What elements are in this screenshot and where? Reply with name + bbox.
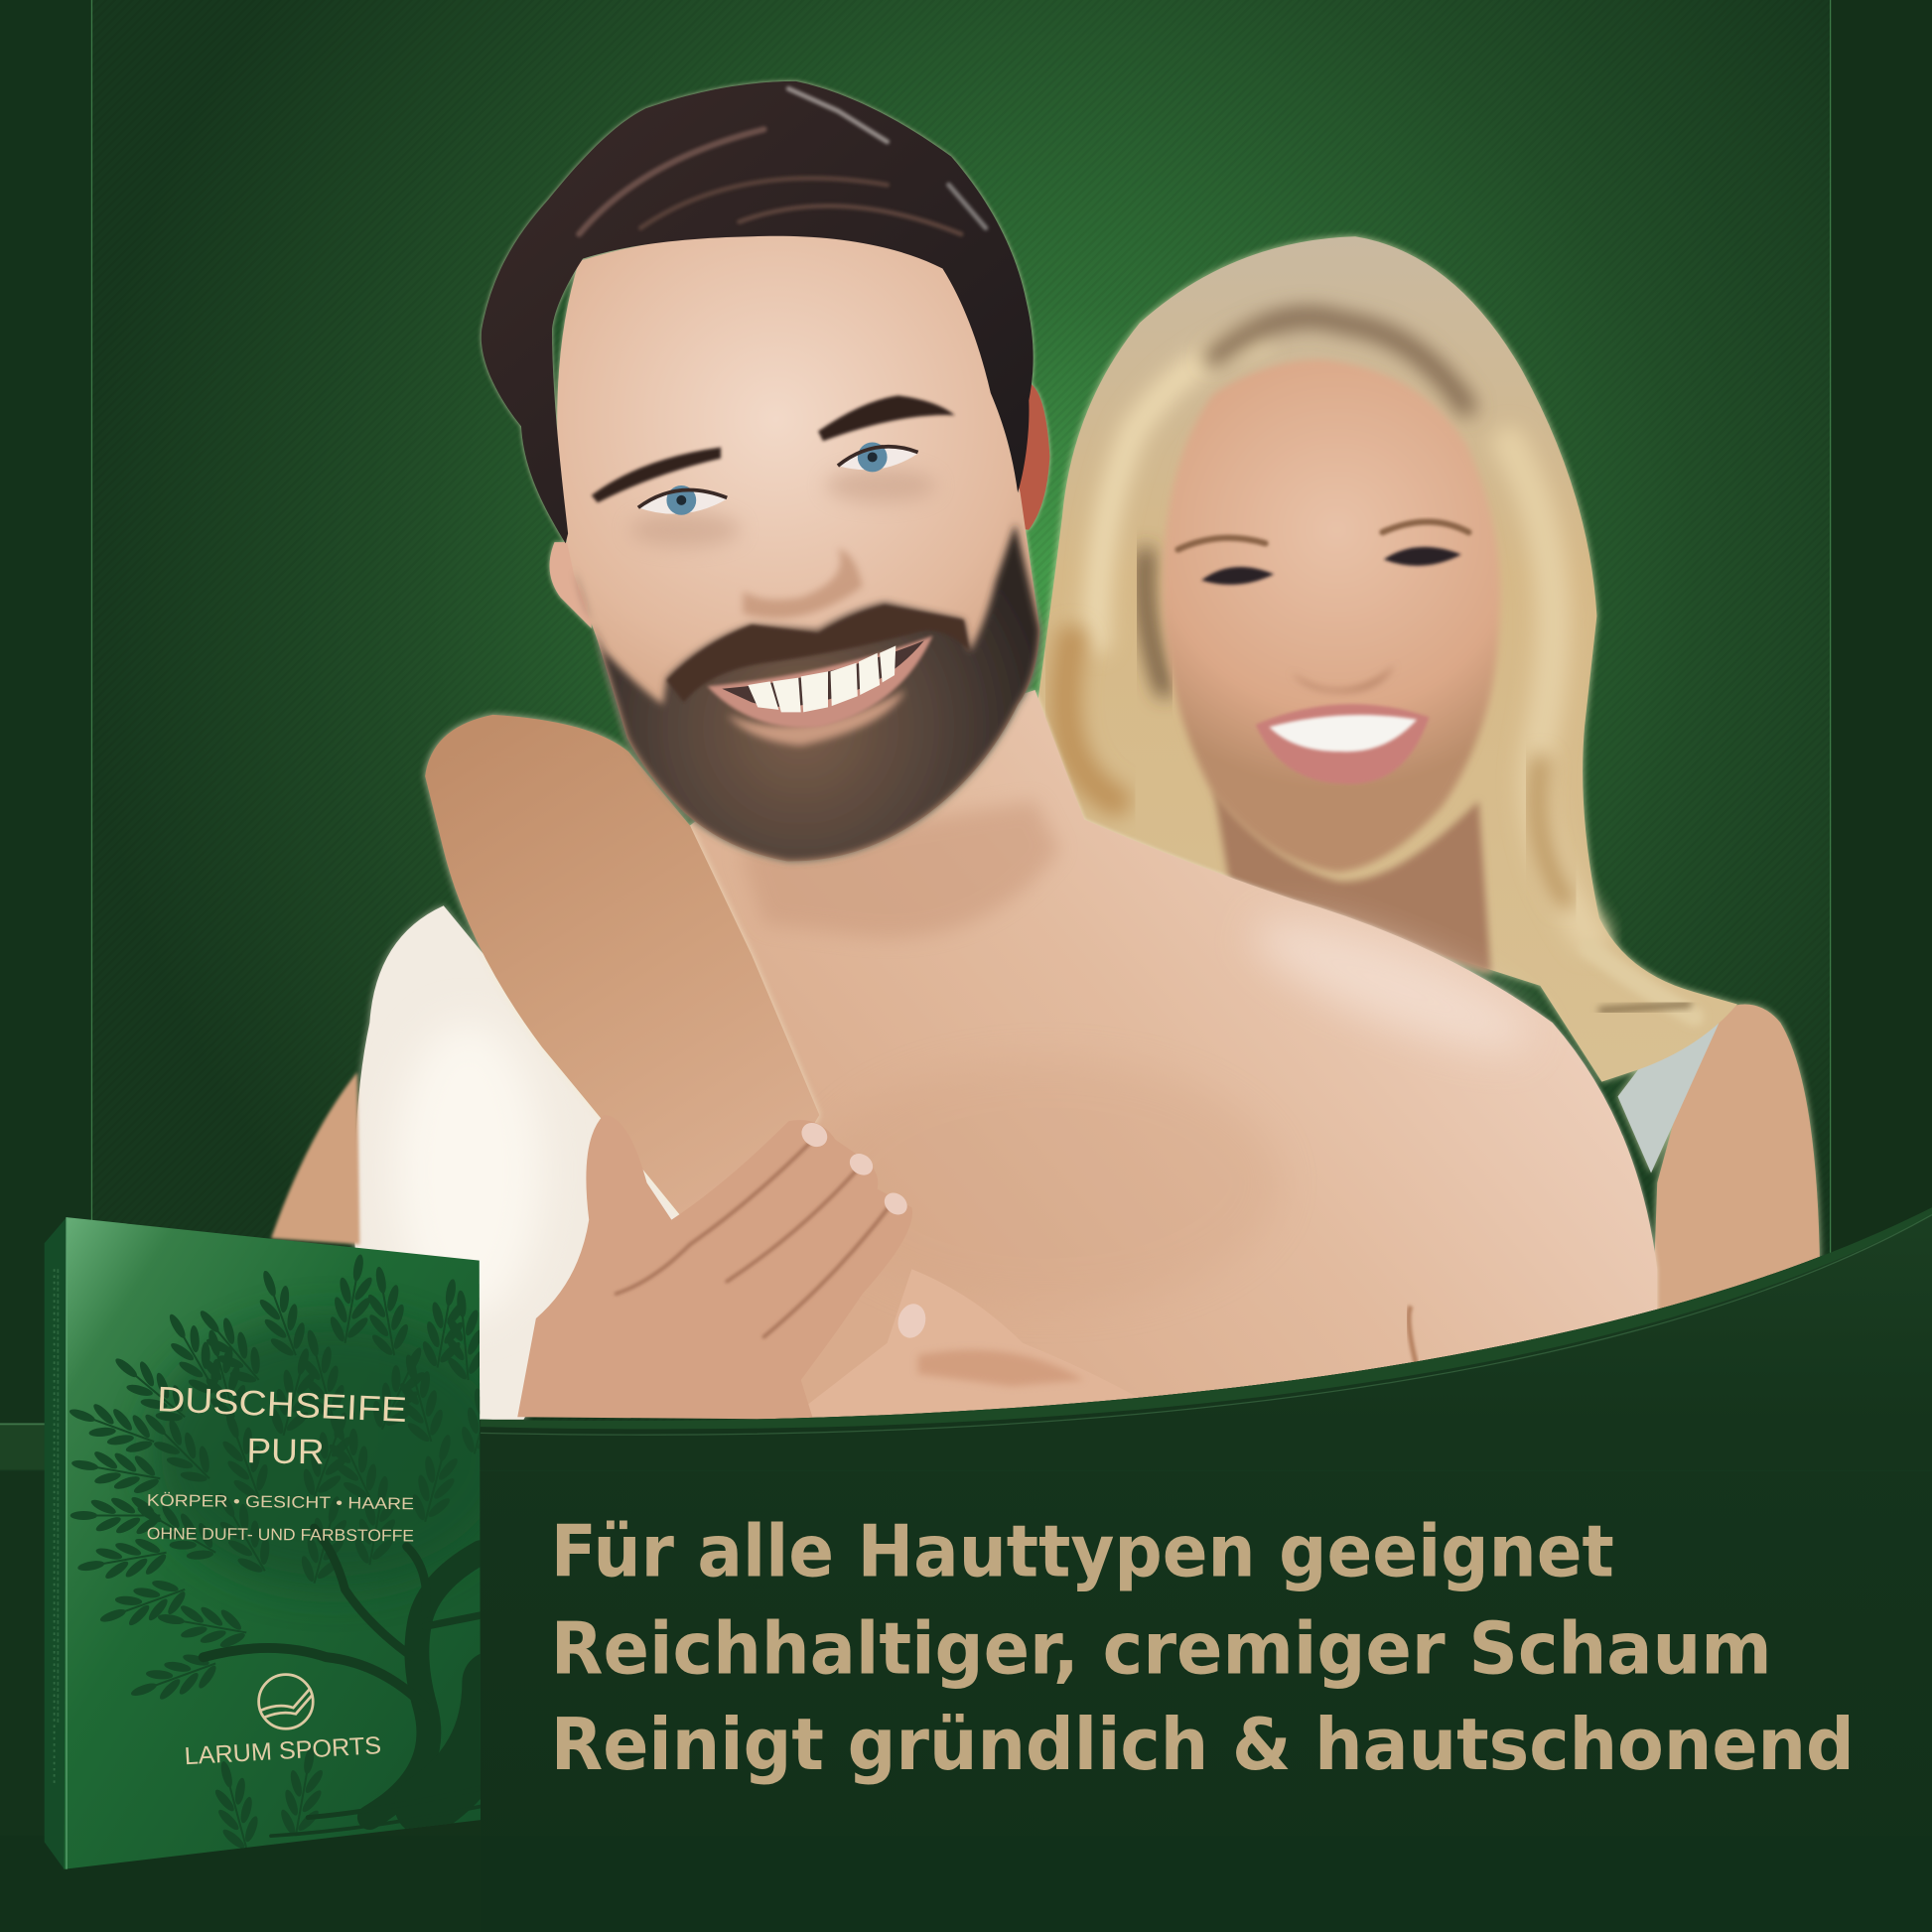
woman's nose (1292, 665, 1395, 692)
box title: PUR (246, 1432, 325, 1472)
left strip behind box (0, 1423, 1932, 1932)
chest hair and shading (740, 801, 1543, 1368)
teeth (748, 645, 896, 712)
beard (574, 523, 1039, 862)
woman's lips (1256, 704, 1430, 784)
brows (592, 395, 955, 502)
woman's shoulder (1651, 1004, 1820, 1355)
woman (1033, 236, 1820, 1355)
skin under lip (727, 690, 905, 746)
mouth interior (722, 640, 924, 707)
hands (517, 1115, 1140, 1420)
second hand (788, 1269, 1140, 1420)
box subtitle (147, 1491, 414, 1545)
towel (354, 905, 690, 1420)
box subtitle: KÖRPER • GESICHT • HAARE (147, 1491, 414, 1513)
woman's brows (1177, 522, 1468, 550)
lips (707, 635, 932, 728)
eye socket shading (629, 469, 936, 547)
woman's face (1163, 359, 1500, 873)
man's head (482, 81, 1049, 862)
finger lines (617, 1140, 894, 1337)
eyes (638, 443, 918, 515)
brand name: LARUM SPORTS (184, 1732, 382, 1770)
woman's dress strap (1618, 996, 1727, 1173)
hair highlights (579, 88, 986, 234)
face (557, 234, 1039, 862)
box front (65, 1217, 481, 1869)
finger nails (797, 1118, 929, 1341)
benefits text: Für alle Hauttypen geeignet (551, 1509, 1614, 1592)
moustache (666, 605, 970, 702)
ears (1008, 381, 1049, 530)
benefits text: Reichhaltiger, cremiger Schaum (551, 1606, 1772, 1690)
box title: DUSCHSEIFE (156, 1380, 408, 1430)
hair shading (1065, 317, 1694, 1017)
box subtitle: OHNE DUFT- UND FARBSTOFFE (147, 1524, 414, 1545)
foliage (63, 1251, 518, 1855)
box highlight edge (66, 1217, 68, 1869)
box spine (45, 1217, 67, 1869)
front hand (517, 1115, 912, 1420)
nose (743, 548, 863, 619)
woman's left arm (271, 1072, 359, 1244)
man's torso (690, 690, 1657, 1430)
trunk and branches (204, 1528, 492, 1836)
woman's eyes (1201, 547, 1461, 585)
product box (45, 1217, 518, 1869)
green backdrop panel (91, 0, 1831, 1430)
woman's teeth (1269, 715, 1417, 752)
woman's hair (1033, 236, 1737, 1082)
hair (482, 81, 1034, 543)
photo: couple (271, 81, 1820, 1430)
box title (156, 1380, 408, 1472)
brand logo (259, 1675, 313, 1728)
olive tree artwork (63, 1251, 518, 1855)
woman's neck (1213, 788, 1491, 973)
bottom curved band (481, 1207, 1932, 1932)
benefits text (551, 1509, 1855, 1786)
woman's arm around man (425, 715, 819, 1244)
benefits text: Reinigt gründlich & hautschonend (551, 1703, 1855, 1786)
